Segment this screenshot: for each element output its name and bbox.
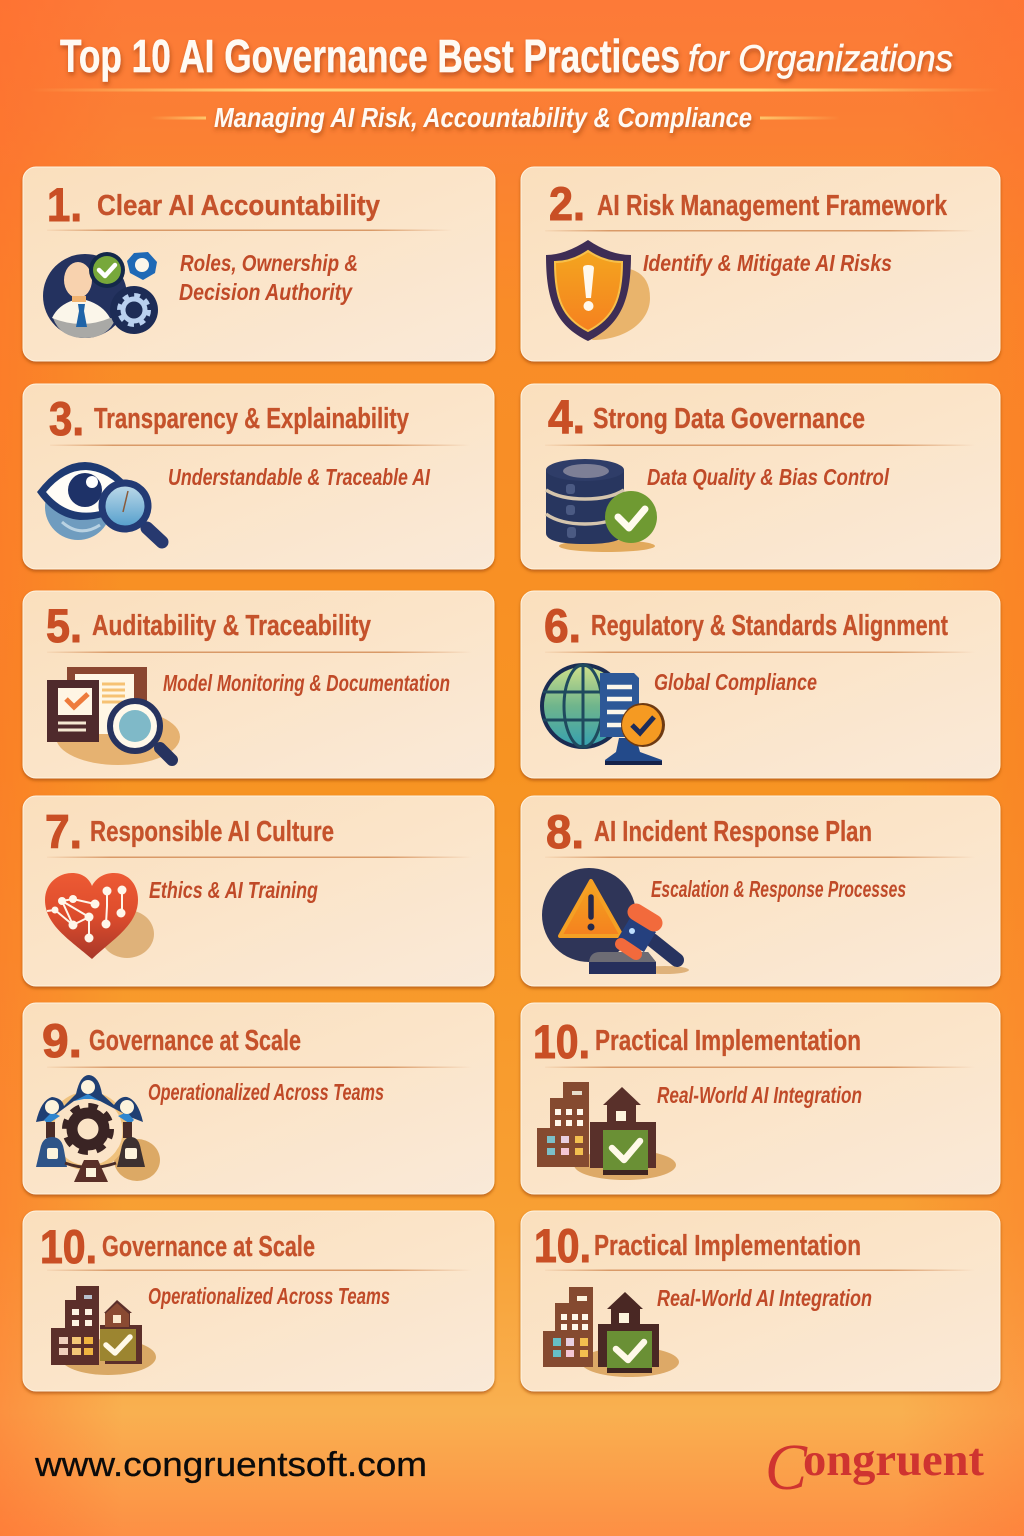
- description: Data Quality & Bias Control: [647, 464, 889, 490]
- panel: 4 Strong Data Governance: [521, 384, 1000, 569]
- title: Top 10 AI Governance Best Practices: [60, 30, 680, 82]
- panel: 3 Transparency & Explainability: [23, 384, 494, 569]
- number: 8.: [546, 805, 584, 858]
- icon: database with check: [546, 459, 657, 552]
- number: 9.: [42, 1014, 82, 1067]
- description: Operationalized Across Teams: [148, 1283, 390, 1309]
- heading: Practical Implementation: [594, 1230, 861, 1262]
- heading: Auditability & Traceability: [92, 610, 371, 642]
- number: 7.: [45, 805, 82, 858]
- icon: heart with network: [45, 873, 154, 959]
- number: 5.: [46, 599, 82, 652]
- description: Understandable & Traceable AI: [168, 464, 430, 490]
- description: Roles, Ownership &: [180, 250, 358, 276]
- heading: Responsible AI Culture: [90, 816, 334, 848]
- heading: Strong Data Governance: [593, 403, 865, 435]
- panel: 10 Practical Implementation: [521, 1003, 1000, 1194]
- logo: Congruent: C: [765, 1431, 808, 1504]
- description: Escalation & Response Processes: [651, 876, 906, 902]
- header: [30, 30, 1000, 133]
- icon: buildings with green check: [543, 1287, 679, 1377]
- panel: 1 Clear AI Accountability: [23, 167, 495, 361]
- heading: AI Incident Response Plan: [594, 816, 872, 848]
- heading: Practical Implementation: [595, 1025, 861, 1057]
- panel: 7 Responsible AI Culture: [23, 796, 494, 986]
- description: Identify & Mitigate AI Risks: [643, 250, 892, 276]
- icon: warning shield: [546, 240, 650, 341]
- number: 4.: [548, 390, 585, 443]
- panel: 8 AI Incident Response Plan: [521, 796, 1000, 986]
- icon: warning triangle and gavel: [542, 868, 689, 974]
- panel: 10 Practical Implementation (repeat): [521, 1211, 1000, 1391]
- panel: 5 Auditability & Traceability: [23, 591, 494, 778]
- panel: 2 AI Risk Management Framework: [521, 167, 1000, 361]
- number: 10.: [40, 1220, 97, 1273]
- icon: globe, document and check: [542, 665, 665, 765]
- description: Real-World AI Integration: [657, 1285, 872, 1311]
- number: 1.: [47, 178, 82, 231]
- number: 10.: [533, 1015, 590, 1068]
- description: [179, 250, 358, 305]
- panel: 10 Governance at Scale: [23, 1211, 494, 1391]
- description: Real-World AI Integration: [657, 1082, 862, 1108]
- footer website: www.congruentsoft.com: [34, 1446, 427, 1484]
- description: Operationalized Across Teams: [148, 1079, 384, 1105]
- description: Decision Authority: [179, 279, 353, 305]
- icon: dark buildings with check: [51, 1286, 156, 1375]
- number: 2.: [549, 177, 585, 230]
- heading: Governance at Scale: [89, 1025, 301, 1057]
- logo: Congruent: [765, 1431, 984, 1504]
- icon: eye and magnifier: [37, 462, 162, 542]
- number: 3.: [49, 392, 84, 445]
- icon: documents and magnifier: [47, 667, 180, 765]
- subtitle: Managing AI Risk, Accountability & Compliance: [214, 102, 752, 133]
- heading: Transparency & Explainability: [94, 403, 409, 435]
- panel: 6 Regulatory & Standards Alignment: [521, 591, 1000, 778]
- icon: team around gear: [36, 1075, 160, 1182]
- heading: Clear AI Accountability: [97, 190, 380, 222]
- title: for Organizations: [688, 38, 953, 79]
- description: Global Compliance: [654, 669, 817, 695]
- icon: person with check and gear: [43, 252, 158, 338]
- logo: Congruent: ongruent: [803, 1434, 984, 1486]
- description: Ethics & AI Training: [149, 877, 318, 903]
- description: Model Monitoring & Documentation: [163, 670, 450, 696]
- number: 6.: [544, 599, 581, 652]
- icon: buildings with check: [537, 1082, 676, 1180]
- heading: Governance at Scale: [102, 1231, 315, 1263]
- panel: 9 Governance at Scale: [23, 1003, 494, 1194]
- number: 10.: [534, 1219, 591, 1272]
